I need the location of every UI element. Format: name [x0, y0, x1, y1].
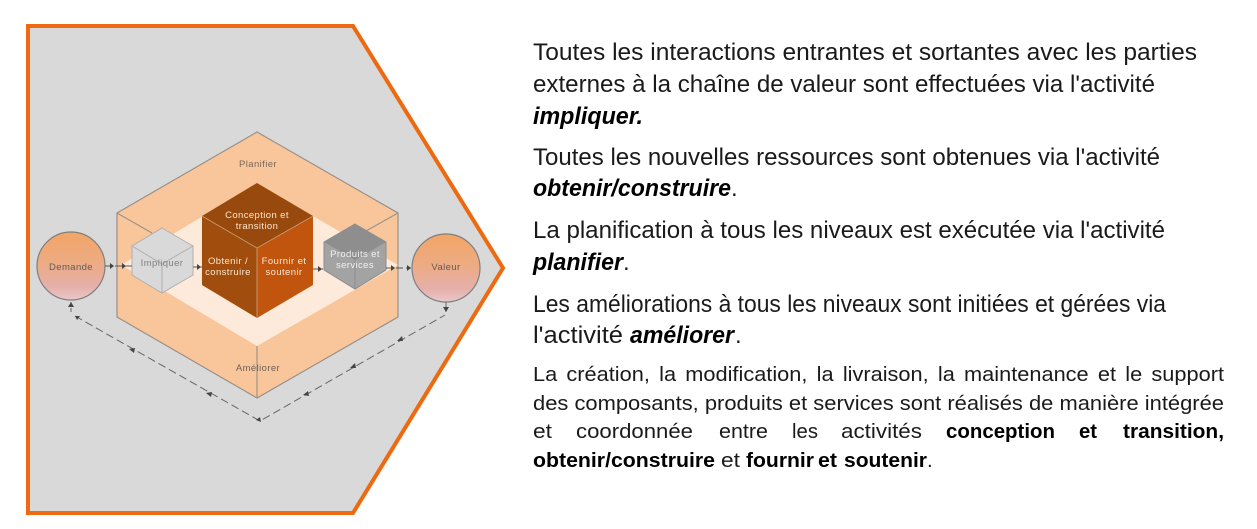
- text block: impliquer: impliquer.: [533, 103, 643, 130]
- label: Obtenir / construire: construire: [205, 267, 251, 278]
- diagram: value chain model: [37, 132, 480, 422]
- panel: value chain background shape: [28, 26, 503, 513]
- text block: améliorer: .: [735, 322, 742, 349]
- label: Fournir et soutenir: Fournir et: [262, 256, 306, 267]
- circle: Demande: [37, 232, 105, 300]
- text block: integrated delivery: les: [792, 420, 818, 443]
- text block: integrated delivery: [533, 363, 1224, 472]
- label: Obtenir / construire: Obtenir /: [208, 256, 248, 267]
- arrows: flow between activities: [105, 263, 411, 272]
- text block: obtenir/construire: obtenir/construire: [533, 175, 731, 202]
- circle: Valeur: [412, 234, 480, 302]
- text block: integrated delivery: et: [533, 420, 552, 443]
- text block: integrated delivery: et: [1079, 420, 1097, 443]
- text block: integrated delivery: entre: [719, 420, 768, 443]
- icon: Impliquer cube: [132, 228, 193, 293]
- text block: améliorer: améliorer: [630, 322, 736, 349]
- text block: obtenir/construire: Toutes les nouvelles ressources sont obtenues via l'activité: [533, 144, 1160, 171]
- text block: obtenir/construire: .: [731, 175, 738, 202]
- text block: améliorer: Les améliorations à tous les niveaux sont initiées et gérées via: [533, 291, 1167, 318]
- text block: obtenir/construire: [533, 144, 1160, 202]
- text block: améliorer: l'activité: [533, 322, 623, 349]
- label: Fournir et soutenir: soutenir: [266, 267, 302, 278]
- text block: planifier: .: [623, 249, 630, 276]
- text block: integrated delivery: activités: [841, 420, 922, 443]
- label: Impliquer: Impliquer: [141, 258, 183, 269]
- text block: planifier: La planification à tous les niveaux est exécutée via l'activité: [533, 217, 1165, 244]
- text block: integrated delivery: .: [927, 449, 933, 472]
- icon: Produits et services cube: [324, 224, 386, 289]
- text block: planifier: [532, 217, 1165, 276]
- text block: integrated delivery: des composants, produits et services sont réalisés de manière intégrée: [533, 392, 1224, 415]
- text block: planifier: planifier: [532, 249, 625, 276]
- text block: impliquer: Toutes les interactions entrantes et sortantes avec les parties: [533, 39, 1197, 66]
- text block: integrated delivery: obtenir/construire: [533, 449, 715, 472]
- text block: integrated delivery: et: [818, 449, 837, 472]
- text block: integrated delivery: La création, la modification, la livraison, la maintenance et le support: [533, 363, 1224, 386]
- circle: Demande: Demande: [49, 262, 93, 273]
- icon: central cube: [202, 183, 313, 318]
- label: Améliorer: Améliorer: [236, 363, 280, 374]
- text block: integrated delivery: et: [721, 449, 740, 472]
- label: Produits et services: services: [336, 260, 374, 271]
- label: Planifier: Planifier: [239, 159, 277, 170]
- text block: integrated delivery: conception: [946, 420, 1055, 443]
- text block: integrated delivery: coordonnée: [576, 420, 693, 443]
- label: Conception et transition: transition: [236, 221, 278, 232]
- text block: améliorer: [533, 291, 1167, 349]
- text block: integrated delivery: fournir: [746, 449, 814, 472]
- label: Conception et transition: Conception et: [225, 210, 289, 221]
- text block: integrated delivery: soutenir: [844, 449, 927, 472]
- text block: impliquer: externes à la chaîne de valeur sont effectuées via l'activité: [533, 71, 1155, 98]
- label: Produits et services: Produits et: [330, 249, 380, 260]
- text block: integrated delivery: transition,: [1123, 420, 1224, 443]
- outer hexagon: Planifier / Améliorer band: [117, 132, 398, 398]
- arrows: dashed improvement loop: [68, 302, 449, 422]
- circle: Valeur: Valeur: [431, 262, 461, 273]
- text block: impliquer: [533, 39, 1197, 130]
